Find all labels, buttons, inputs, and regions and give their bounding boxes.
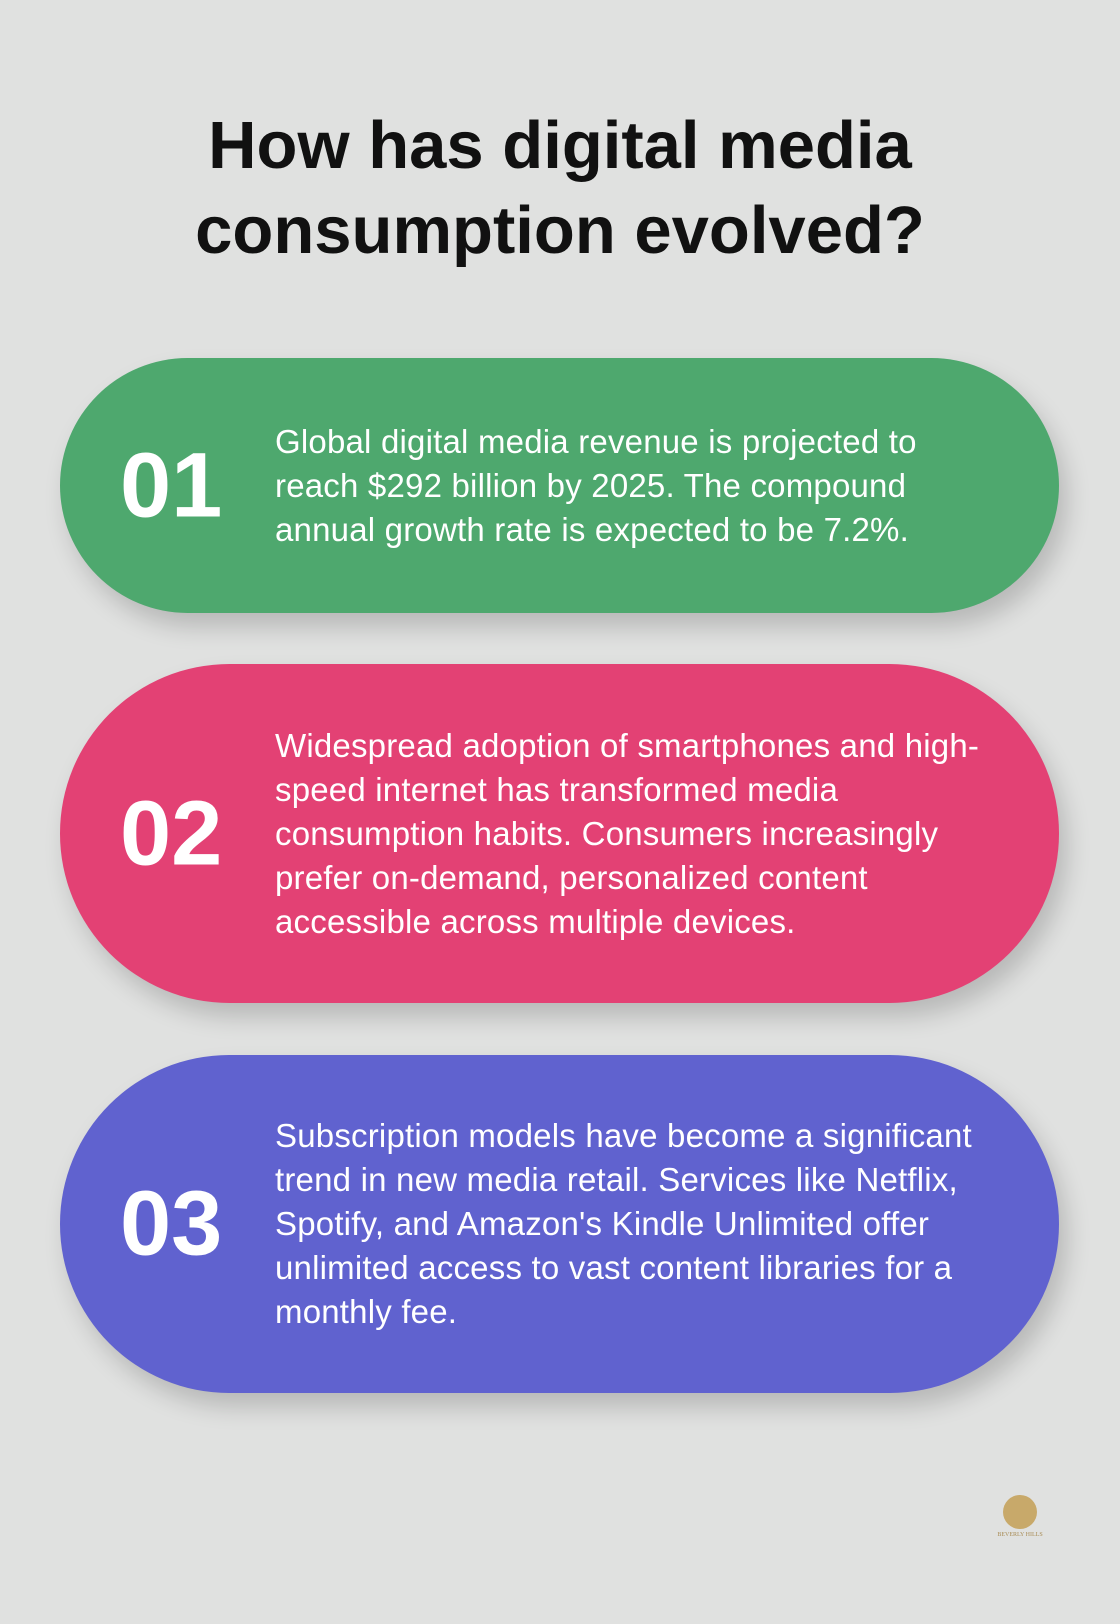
text 01 — [275, 422, 917, 548]
text 03: trend in new media retail. Services like Netflix, — [275, 1161, 958, 1198]
number 03: 03 — [120, 1172, 222, 1274]
text 02: Widespread adoption of smartphones and high- — [275, 726, 979, 764]
text 01: reach $292 billion by 2025. The compound — [275, 466, 906, 504]
logo — [997, 1495, 1043, 1538]
text 03: Spotify, and Amazon's Kindle Unlimited offer — [275, 1205, 929, 1242]
title: consumption evolved? — [195, 193, 925, 268]
text 02: prefer on-demand, personalized content — [275, 858, 868, 896]
text 03: unlimited access to vast content libraries for a — [275, 1249, 952, 1286]
title: How has digital media — [208, 108, 912, 183]
number 01: 01 — [120, 434, 222, 536]
panel: 01 — [60, 358, 1059, 613]
text 01: annual growth rate is expected to be 7.2%. — [275, 510, 909, 548]
text 03: monthly fee. — [275, 1293, 457, 1330]
number 02: 02 — [120, 782, 222, 884]
title — [195, 108, 925, 268]
text 02: speed internet has transformed media — [275, 770, 838, 808]
logo: BEVERLY HILLS — [997, 1532, 1043, 1538]
text 01: Global digital media revenue is projected to — [275, 422, 917, 460]
panel: 03 — [60, 1055, 1059, 1393]
text 03 — [275, 1117, 972, 1330]
panel: 02 — [60, 664, 1059, 1003]
text 02: accessible across multiple devices. — [275, 902, 796, 940]
text 02: consumption habits. Consumers increasingly — [275, 814, 938, 852]
text 02 — [275, 726, 979, 940]
text 03: Subscription models have become a significant — [275, 1117, 972, 1154]
